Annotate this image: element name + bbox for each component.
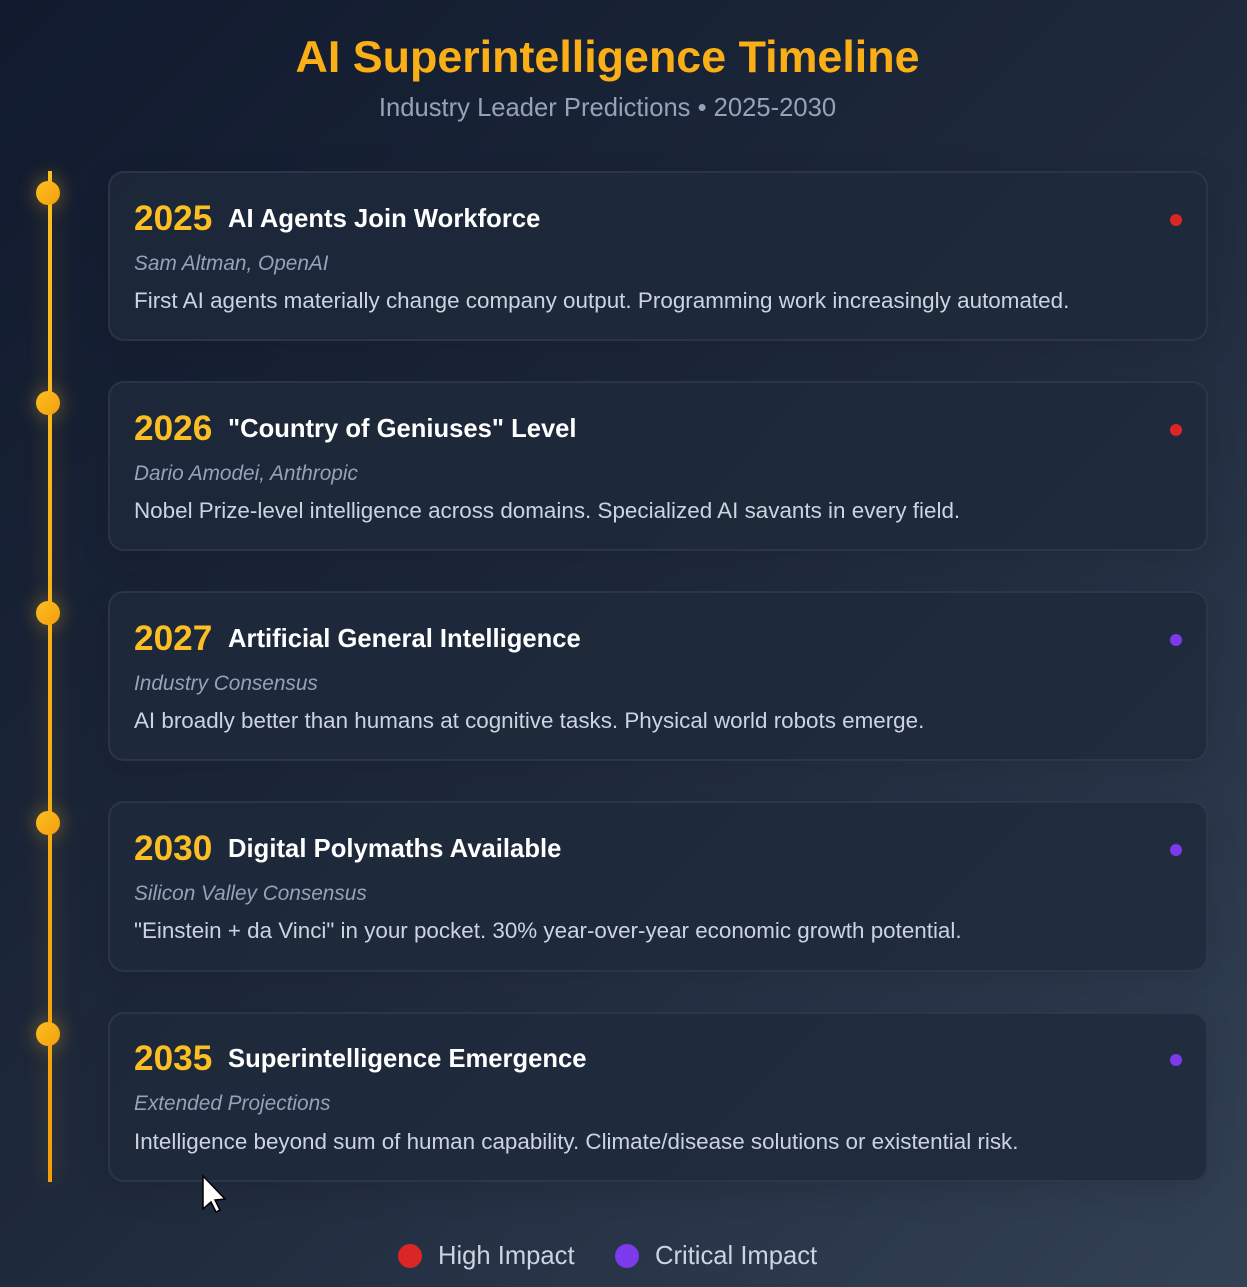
description 2027: AI broadly better than humans at cognitive tasks. Physical world robots emerge. (134, 708, 924, 733)
timeline marker 2030 (36, 811, 60, 835)
heading: Artificial General Intelligence: Artificial General Intelligence (228, 625, 581, 653)
year 2026: 2026 (134, 409, 212, 448)
panel: 2026 card (108, 381, 1208, 551)
legend swatch: critical impact (615, 1244, 639, 1268)
legend swatch: high impact (398, 1244, 422, 1268)
year 2035: 2035 (134, 1039, 212, 1078)
year 2025: 2025 (134, 199, 212, 238)
icon: mouse cursor (202, 1174, 226, 1213)
icon: critical impact dot (1170, 1054, 1182, 1066)
icon: high impact dot (1170, 214, 1182, 226)
panel: 2025 card (108, 171, 1208, 341)
icon: critical impact dot (1170, 634, 1182, 646)
timeline marker 2035 (36, 1022, 60, 1046)
description 2035: Intelligence beyond sum of human capability. Climate/disease solutions or existential risk. (134, 1129, 1018, 1154)
description 2030: "Einstein + da Vinci" in your pocket. 30% year-over-year economic growth potential. (134, 918, 962, 943)
icon: critical impact dot (1170, 844, 1182, 856)
heading: Superintelligence Emergence: Superintelligence Emergence (228, 1045, 586, 1073)
heading: AI Agents Join Workforce: AI Agents Join Workforce (228, 205, 540, 233)
heading: Digital Polymaths Available: Digital Polymaths Available (228, 835, 561, 863)
title: AI Superintelligence Timeline (295, 32, 920, 82)
timeline marker 2025 (36, 181, 60, 205)
heading: Country of Geniuses: "Country of Geniuses" Level (228, 415, 577, 443)
description 2026: Nobel Prize-level intelligence across domains. Specialized AI savants in every field. (134, 498, 960, 523)
legend label: high impact: High Impact (438, 1242, 575, 1270)
source: Dario Amodei: Dario Amodei, Anthropic (134, 462, 358, 485)
icon: high impact dot (1170, 424, 1182, 436)
source: Silicon Valley Consensus: Silicon Valley Consensus (134, 882, 367, 905)
year 2030: 2030 (134, 829, 212, 868)
timeline marker 2026 (36, 391, 60, 415)
panel: 2030 card (108, 801, 1208, 972)
source: Extended Projections: Extended Projections (134, 1092, 331, 1115)
source: Industry Consensus: Industry Consensus (134, 672, 318, 695)
description 2025: First AI agents materially change company output. Programming work increasingly automated. (134, 288, 1069, 313)
subtitle: Industry Leader Predictions • 2025-2030 (379, 94, 836, 122)
timeline vertical line (48, 171, 52, 1182)
source: Sam Altman: Sam Altman, OpenAI (134, 252, 329, 275)
timeline marker 2027 (36, 601, 60, 625)
year 2027: 2027 (134, 619, 212, 658)
panel: 2035 card (108, 1012, 1208, 1182)
legend label: critical impact: Critical Impact (655, 1242, 817, 1270)
panel: 2027 card (108, 591, 1208, 761)
